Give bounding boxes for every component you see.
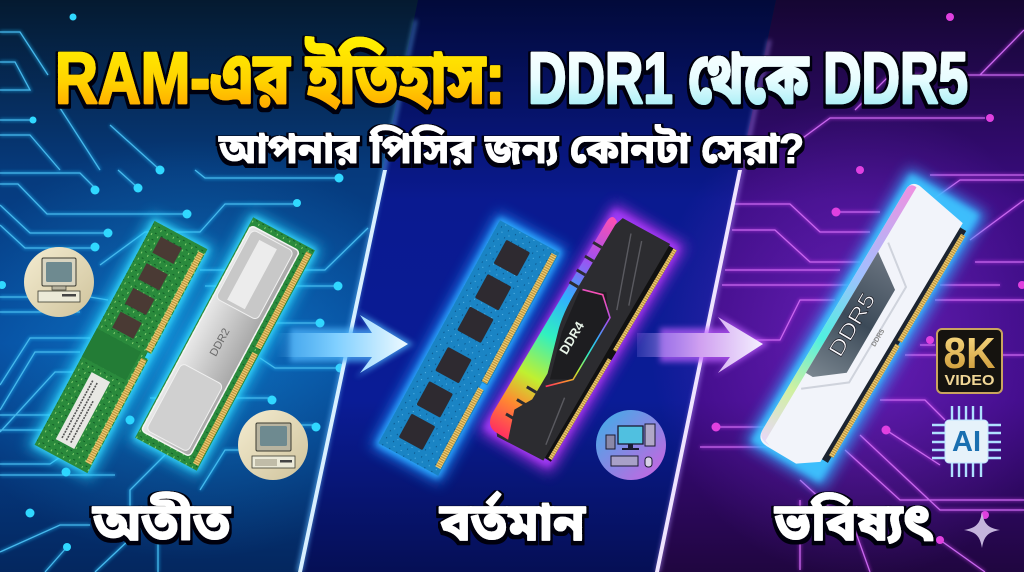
arrow: past to present (276, 310, 414, 378)
RAM module: white DDR5 (746, 168, 987, 489)
title (55, 36, 968, 119)
RAM module: white DDR5: DDR5 (825, 289, 880, 361)
icon: AI chip: AI (952, 426, 981, 458)
circuit traces: past panel (0, 14, 368, 572)
subtitle: আপনার পিসির জন্য কোনটা সেরা? (218, 124, 804, 172)
circuit traces: future panel (700, 13, 1024, 572)
divider: right slanted line (655, 40, 771, 572)
RAM module: green DDR1 (27, 214, 215, 480)
icon: modern desktop computer (596, 410, 666, 480)
panel: future background (650, 0, 1024, 572)
label: future: ভবিষ্যৎ (774, 492, 933, 552)
badge: 8K video: VIDEO (944, 372, 995, 389)
label: past: অতীত (92, 492, 231, 552)
label: present: বর্তমান (439, 492, 586, 552)
arrow: present to future (637, 312, 769, 376)
sticker label (56, 372, 110, 449)
badge: 8K video (937, 329, 1002, 393)
RAM module: silver DDR2: DDR2 (208, 326, 232, 359)
badge: 8K video: 8K (944, 329, 996, 378)
icon: retro computer 1 (24, 247, 94, 317)
divider: left slanted line (296, 20, 417, 572)
icon: AI chip (932, 406, 1001, 477)
icon: sparkle star (964, 512, 1000, 548)
RAM module: white DDR5: DDR5 (871, 328, 886, 348)
RAM module: RGB DDR4 (480, 204, 685, 473)
title part: yellow: RAM-এর ইতিহাস: (55, 36, 505, 119)
RAM module: RGB DDR4: DDR4 (556, 318, 588, 357)
panel: present background (300, 0, 776, 572)
RAM module: blue DDR3 (371, 213, 567, 483)
RAM module: silver DDR2 (128, 211, 322, 477)
icon: retro computer 2 (238, 410, 308, 480)
